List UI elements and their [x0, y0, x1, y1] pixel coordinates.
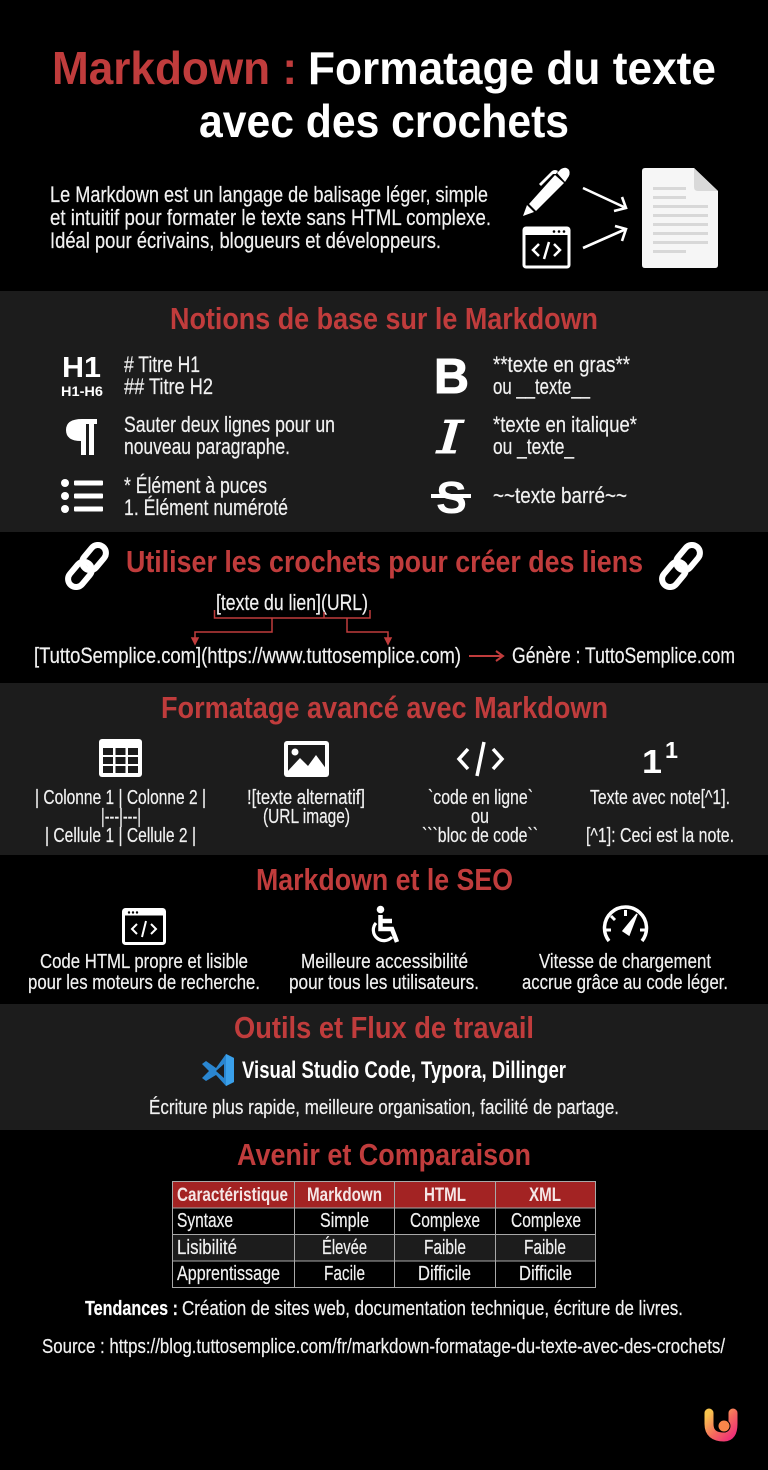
text: listes: 1. Élément numéroté [124, 495, 288, 520]
icon: italic: I [436, 411, 465, 464]
text: code: ```bloc de code`` [422, 824, 538, 847]
text: code propre: Code HTML propre et lisible [40, 950, 248, 973]
arrow: génère [469, 651, 503, 661]
icon: H1: H1 [62, 352, 101, 384]
text: gras [493, 352, 630, 399]
text: listes: * Élément à puces [124, 473, 267, 498]
text: tableau: |---|---| [101, 805, 141, 828]
panel: notions de base [0, 291, 768, 532]
section: avenir [42, 1137, 725, 1358]
text: note: Texte avec note[^1]. [590, 786, 730, 809]
icon: code window [524, 228, 569, 267]
text: titres: ## Titre H2 [124, 374, 213, 399]
table row: syntaxe: Complexe [511, 1210, 581, 1232]
icon: browser code [124, 910, 164, 944]
icon: link left [65, 542, 109, 590]
text: paragraphe: Sauter deux lignes pour un [124, 412, 335, 437]
text: tableau: | Cellule 1 | Cellule 2 | [45, 824, 196, 847]
text: italique [493, 412, 637, 459]
intro text [50, 182, 491, 253]
text: gras: **texte en gras** [493, 352, 630, 377]
icon: list [61, 479, 103, 513]
icon: footnote [642, 737, 678, 780]
text: code [422, 786, 538, 847]
table header: HTML [424, 1184, 466, 1206]
table row: apprentissage: Facile [324, 1263, 365, 1285]
text: accessibilité: Meilleure accessibilité [301, 950, 468, 973]
section: liens [34, 542, 735, 668]
text: paragraphe: nouveau paragraphe. [124, 434, 290, 459]
diagram: bracket connectors [192, 610, 391, 644]
table header: Markdown [307, 1184, 382, 1206]
title [52, 42, 716, 147]
icon: image [284, 741, 329, 777]
text: syntaxe lien: [texte du lien](URL) [216, 590, 368, 615]
table row: syntaxe: Simple [320, 1210, 369, 1232]
table row: lisibilité [177, 1236, 566, 1259]
table row: apprentissage: Difficile [418, 1263, 471, 1285]
intro diagram: pen and code to document [523, 168, 718, 268]
icon: speedometer [604, 907, 646, 941]
table header [177, 1184, 561, 1206]
text: italique: ou _texte_ [493, 434, 575, 459]
text: tableau [35, 786, 206, 847]
text: code propre: pour les moteurs de recherche. [28, 971, 260, 994]
heading: avenir: Avenir et Comparaison [237, 1137, 531, 1172]
text: note [586, 786, 734, 847]
text: titres: # Titre H1 [124, 352, 200, 377]
arrow: code to document [583, 226, 626, 248]
table row: lisibilité: Faible [424, 1237, 466, 1259]
section: SEO [28, 862, 728, 994]
heading: liens: Utiliser les crochets pour créer des liens [126, 544, 643, 579]
table row: apprentissage: Difficile [519, 1263, 572, 1285]
title: avec des crochets [199, 95, 569, 147]
text: image: (URL image) [263, 805, 350, 828]
panel: formatage avancé [0, 683, 768, 855]
table row: lisibilité: Faible [524, 1237, 566, 1259]
text: barré: ~~texte barré~~ [493, 483, 627, 508]
icon: pen [523, 168, 570, 216]
table row: syntaxe: Syntaxe [177, 1210, 233, 1232]
icon: VS Code [202, 1054, 234, 1086]
title: Markdown : [52, 42, 297, 94]
table row: syntaxe: Complexe [410, 1210, 480, 1232]
heading: SEO: Markdown et le SEO [256, 862, 513, 897]
icon: footnote: 1 [665, 737, 678, 763]
text: vitesse: Vitesse de chargement [539, 950, 711, 973]
table row: lisibilité: Élevée [322, 1236, 367, 1259]
text: code: ou [471, 805, 489, 828]
table row: apprentissage [177, 1263, 572, 1285]
arrow: pen to document [583, 188, 626, 211]
comparison table [172, 1182, 596, 1288]
table header: XML [529, 1184, 561, 1206]
text: tableau: | Colonne 1 | Colonne 2 | [35, 786, 206, 809]
heading: formatage avancé: Formatage avancé avec Markdown [161, 690, 608, 725]
table row: syntaxe [177, 1210, 581, 1232]
text: exemple lien: [TuttoSemplice.com](https://www.tuttosemplice.com) [34, 643, 461, 668]
text: image: ![texte alternatif] [247, 786, 365, 809]
title: Formatage du texte [308, 42, 716, 94]
icon: pilcrow [66, 419, 97, 455]
icon: footnote: 1 [642, 743, 662, 780]
icon: bold: B [434, 350, 469, 404]
icon: wheelchair [373, 906, 397, 942]
intro text: Idéal pour écrivains, blogueurs et développeurs. [50, 228, 441, 253]
text: listes [124, 473, 288, 520]
icon: strikethrough: S [436, 472, 467, 523]
icon: table [99, 739, 142, 777]
panel: outils [0, 1004, 768, 1130]
text: italique: *texte en italique* [493, 412, 637, 437]
icon: H1 [61, 352, 103, 399]
text: vitesse: accrue grâce au code léger. [522, 971, 728, 994]
icon: H1: H1-H6 [61, 383, 103, 399]
text: bénéfices: Écriture plus rapide, meilleure organisation, facilité de partage. [149, 1096, 619, 1119]
text: accessibilité [289, 950, 479, 994]
heading: notions: Notions de base sur le Markdown [170, 301, 598, 336]
text: code propre [28, 950, 260, 994]
text: outils: Visual Studio Code, Typora, Dillinger [242, 1057, 566, 1084]
icon: link right [659, 542, 703, 590]
text: paragraphe [124, 412, 335, 459]
icon: document [642, 168, 718, 268]
text: accessibilité: pour tous les utilisateurs. [289, 971, 479, 994]
intro text: Le Markdown est un langage de balisage léger, simple [50, 182, 488, 207]
intro text: et intuitif pour formater le texte sans HTML complexe. [50, 205, 491, 230]
text: image [247, 786, 365, 828]
logo [709, 1413, 733, 1437]
heading: outils: Outils et Flux de travail [234, 1010, 534, 1045]
table row: lisibilité: Lisibilité [177, 1237, 237, 1259]
text: vitesse [522, 950, 728, 994]
icon: code [459, 742, 502, 776]
text: code: `code en ligne` [428, 786, 533, 809]
text: tendances: Création de sites web, documentation technique, écriture de livres. [182, 1298, 683, 1320]
text: tendances: Tendances : [85, 1298, 178, 1320]
table row: apprentissage: Apprentissage [177, 1263, 280, 1285]
text: gras: ou __texte__ [493, 374, 591, 399]
text: titres [124, 352, 213, 399]
table header: Caractéristique [177, 1184, 288, 1206]
